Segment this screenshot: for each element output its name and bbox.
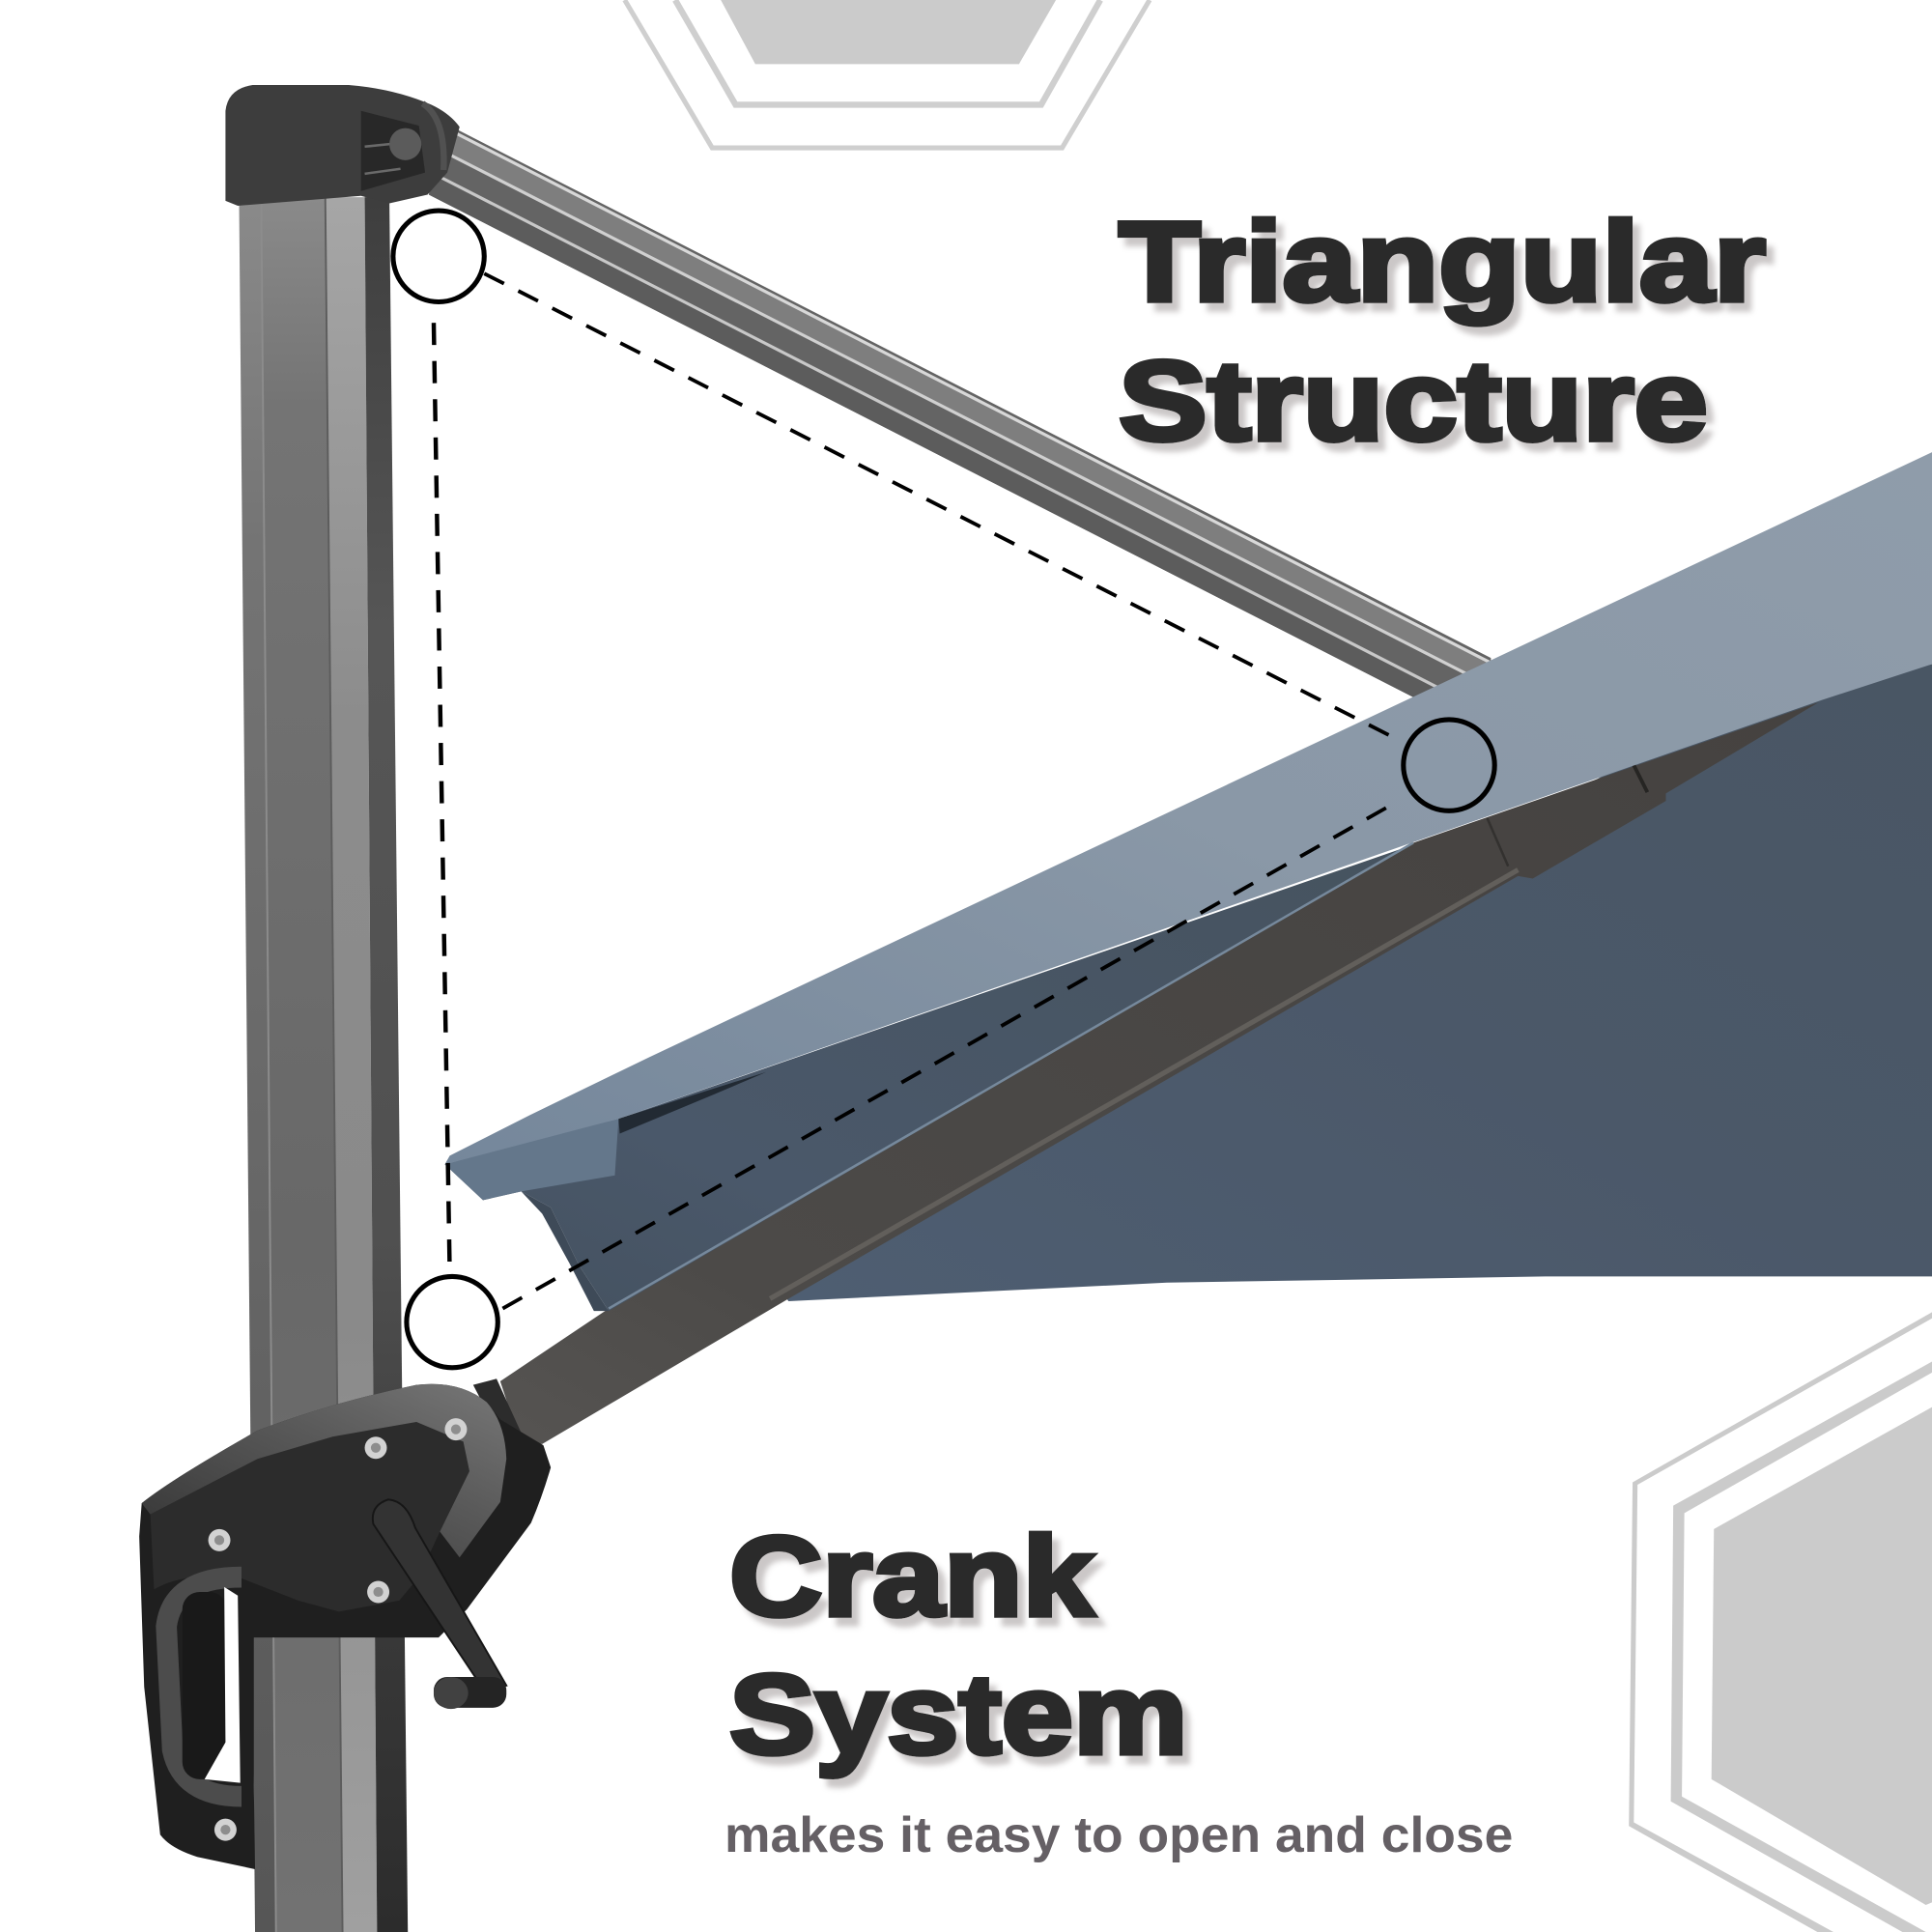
handle grip bbox=[166, 1577, 242, 1797]
heading: Crank System: System bbox=[729, 1651, 1188, 1777]
heading: Crank System: Crank bbox=[729, 1513, 1094, 1639]
housing top rim bbox=[142, 1384, 506, 1557]
handle inner shadow bbox=[183, 1592, 227, 1779]
main pole bbox=[239, 197, 408, 1932]
crank housing bbox=[139, 1384, 551, 1869]
housing face bbox=[151, 1422, 469, 1611]
heading: Triangular Structure: Structure bbox=[1119, 337, 1708, 464]
triangle diagram: dashed lines and joint circles bbox=[393, 211, 1494, 1368]
upper support arm bbox=[429, 124, 1491, 737]
pole top cap with bracket bbox=[225, 85, 460, 206]
decoration: bottom-right hexagon bbox=[1629, 1312, 1932, 1932]
heading: Triangular Structure: Triangular bbox=[1119, 198, 1766, 325]
heading: Triangular Structure bbox=[1119, 198, 1766, 464]
heading: Crank System bbox=[729, 1513, 1188, 1777]
canopy top panel bbox=[444, 452, 1932, 1164]
decoration: top hexagon bbox=[625, 0, 1150, 148]
lower crank arm bbox=[473, 702, 1819, 1444]
handle opening bbox=[205, 1587, 241, 1783]
subtitle: makes it easy to open and close bbox=[724, 1807, 1513, 1863]
canopy inner fabric flap bbox=[444, 842, 1413, 1311]
crank handle bbox=[373, 1499, 506, 1709]
bolts bbox=[209, 1418, 467, 1841]
canopy underside bbox=[764, 665, 1932, 1301]
